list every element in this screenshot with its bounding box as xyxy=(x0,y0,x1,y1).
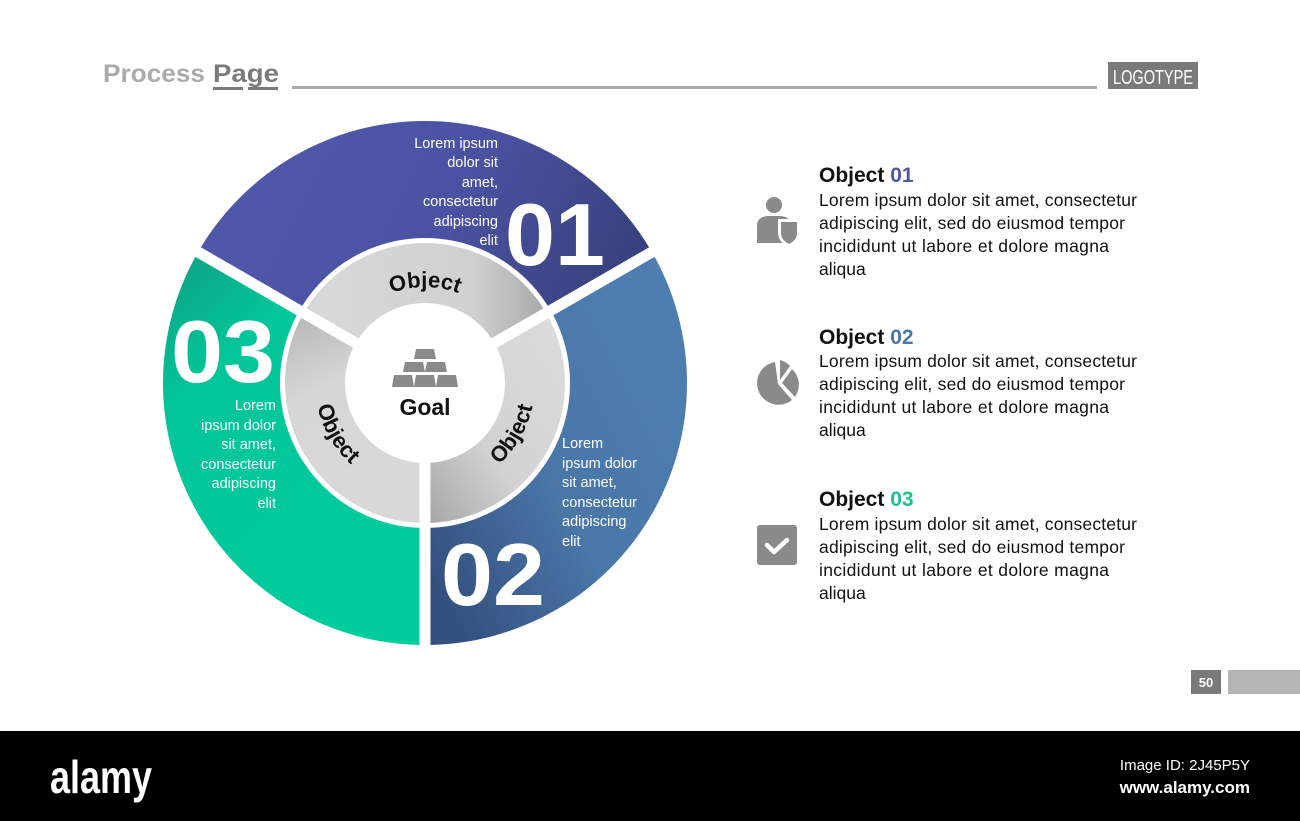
number 02: 02 xyxy=(441,525,545,624)
text 02: Lorem xyxy=(562,436,603,452)
text 02: elit xyxy=(562,534,581,550)
text 01: dolor sit xyxy=(447,155,498,171)
item 02: incididunt ut labore et dolore magna xyxy=(819,397,1109,417)
page number: 50 xyxy=(1199,675,1213,690)
item 02: aliqua xyxy=(819,420,866,440)
text 02: consectetur xyxy=(562,495,637,511)
icon: gold bars xyxy=(392,349,458,387)
header title: Process xyxy=(103,60,205,88)
text 02 xyxy=(562,436,637,550)
icon: checkbox xyxy=(757,525,797,565)
text 01: consectetur xyxy=(423,194,498,210)
item 03: Object 03 xyxy=(819,488,914,511)
item 01: adipiscing elit, sed do eiusmod tempor xyxy=(819,213,1125,233)
item 03: Lorem ipsum dolor sit amet, consectetur xyxy=(819,514,1137,534)
footer bar xyxy=(0,731,1300,821)
ring labels: Object xyxy=(318,404,360,464)
goal label: Goal xyxy=(399,394,451,420)
footer bar: alamy xyxy=(50,751,152,803)
text 01: amet, xyxy=(462,175,498,191)
logotype: LOGOTYPE xyxy=(1113,67,1193,89)
ring labels: Object xyxy=(491,404,532,462)
segment 03 xyxy=(163,252,425,645)
footer bar: www.alamy.com xyxy=(1119,778,1250,797)
item 01 xyxy=(757,164,1137,279)
text 03: adipiscing xyxy=(212,476,276,492)
segment 02 xyxy=(425,252,687,645)
icon: person with shield xyxy=(757,197,800,247)
item 01: Lorem ipsum dolor sit amet, consectetur xyxy=(819,190,1137,210)
item 01: aliqua xyxy=(819,259,866,279)
text 03: elit xyxy=(257,496,276,512)
item 01: incididunt ut labore et dolore magna xyxy=(819,236,1109,256)
text 03 xyxy=(201,398,276,512)
text 02: sit amet, xyxy=(562,475,617,491)
ring segments xyxy=(304,243,546,383)
text 01: adipiscing xyxy=(434,214,498,230)
number 01: 01 xyxy=(505,185,605,284)
header title xyxy=(103,60,279,90)
icon: pie chart xyxy=(757,360,799,405)
footer bar: Image ID: 2J45P5Y xyxy=(1120,757,1250,774)
item 03: aliqua xyxy=(819,583,866,603)
item 02: adipiscing elit, sed do eiusmod tempor xyxy=(819,374,1125,394)
header title: Page xyxy=(213,60,279,88)
segment 01 xyxy=(198,121,652,383)
logotype xyxy=(1108,62,1198,89)
item 01: Object 01 xyxy=(819,164,914,187)
ring labels xyxy=(318,271,532,464)
item 03: adipiscing elit, sed do eiusmod tempor xyxy=(819,537,1125,557)
text 02: adipiscing xyxy=(562,514,626,530)
text 02: ipsum dolor xyxy=(562,456,637,472)
text 03: consectetur xyxy=(201,457,276,473)
text 01: elit xyxy=(479,233,498,249)
number 03: 03 xyxy=(171,302,275,401)
item 02: Lorem ipsum dolor sit amet, consectetur xyxy=(819,351,1137,371)
text 03: sit amet, xyxy=(221,437,276,453)
text 01: Lorem ipsum xyxy=(414,136,498,152)
text 03: ipsum dolor xyxy=(201,418,276,434)
item 03 xyxy=(757,488,1137,603)
page number xyxy=(1191,670,1300,694)
circular diagram xyxy=(163,121,687,645)
ring labels: Object xyxy=(390,271,462,293)
text 03: Lorem xyxy=(235,398,276,414)
item 02: Object 02 xyxy=(819,326,914,349)
item 02 xyxy=(757,326,1137,440)
item 03: incididunt ut labore et dolore magna xyxy=(819,560,1109,580)
text 01 xyxy=(414,136,498,249)
